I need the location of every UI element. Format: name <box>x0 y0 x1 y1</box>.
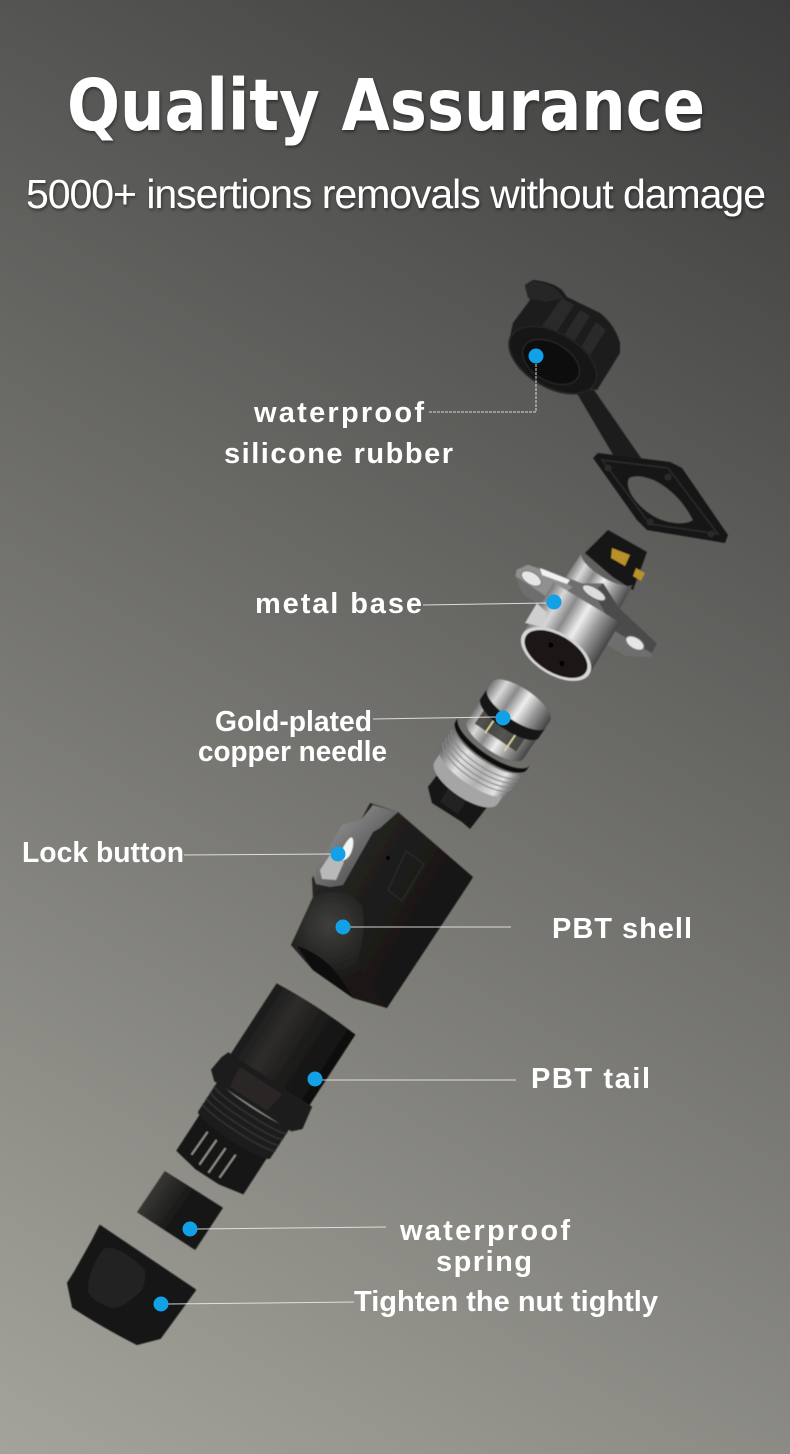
part: PBT shell with lock button <box>291 803 473 1008</box>
part: gold-plated copper needle insert <box>422 667 564 829</box>
label: gold-plated copper needle <box>198 706 387 768</box>
marker dots <box>154 348 562 1312</box>
label: tighten the nut tightly: Tighten the nut tightly <box>354 1286 658 1318</box>
label: metal base: metal base <box>255 588 422 620</box>
part: waterproof silicone rubber cap with strap <box>498 280 728 543</box>
label: gold-plated copper needle: Gold-plated <box>215 706 372 738</box>
subtitle: 5000+ insertions removals without damage <box>26 171 766 217</box>
part: PBT tail <box>161 977 362 1206</box>
label: PBT tail: PBT tail <box>531 1063 650 1095</box>
label: PBT shell: PBT shell <box>552 913 692 945</box>
label: waterproof spring: spring <box>436 1246 532 1278</box>
leader lines <box>168 358 546 1304</box>
rear black block <box>428 762 498 829</box>
part: metal base <box>479 529 679 715</box>
label: waterproof spring <box>399 1215 570 1278</box>
exploded connector product illustration <box>68 280 728 1344</box>
label: waterproof silicone rubber: silicone rubber <box>224 438 453 470</box>
part: waterproof spring seal <box>138 1172 222 1249</box>
part: tightening nut <box>68 1226 195 1344</box>
label: waterproof spring: waterproof <box>399 1215 570 1247</box>
lock button <box>313 805 398 887</box>
title: Quality Assurance <box>67 64 705 147</box>
label: gold-plated copper needle: copper needle <box>198 736 387 768</box>
label: waterproof silicone rubber <box>224 397 453 470</box>
label: waterproof silicone rubber: waterproof <box>253 397 424 429</box>
rear black contact block <box>585 530 647 590</box>
label: lock button: Lock button <box>22 837 184 869</box>
